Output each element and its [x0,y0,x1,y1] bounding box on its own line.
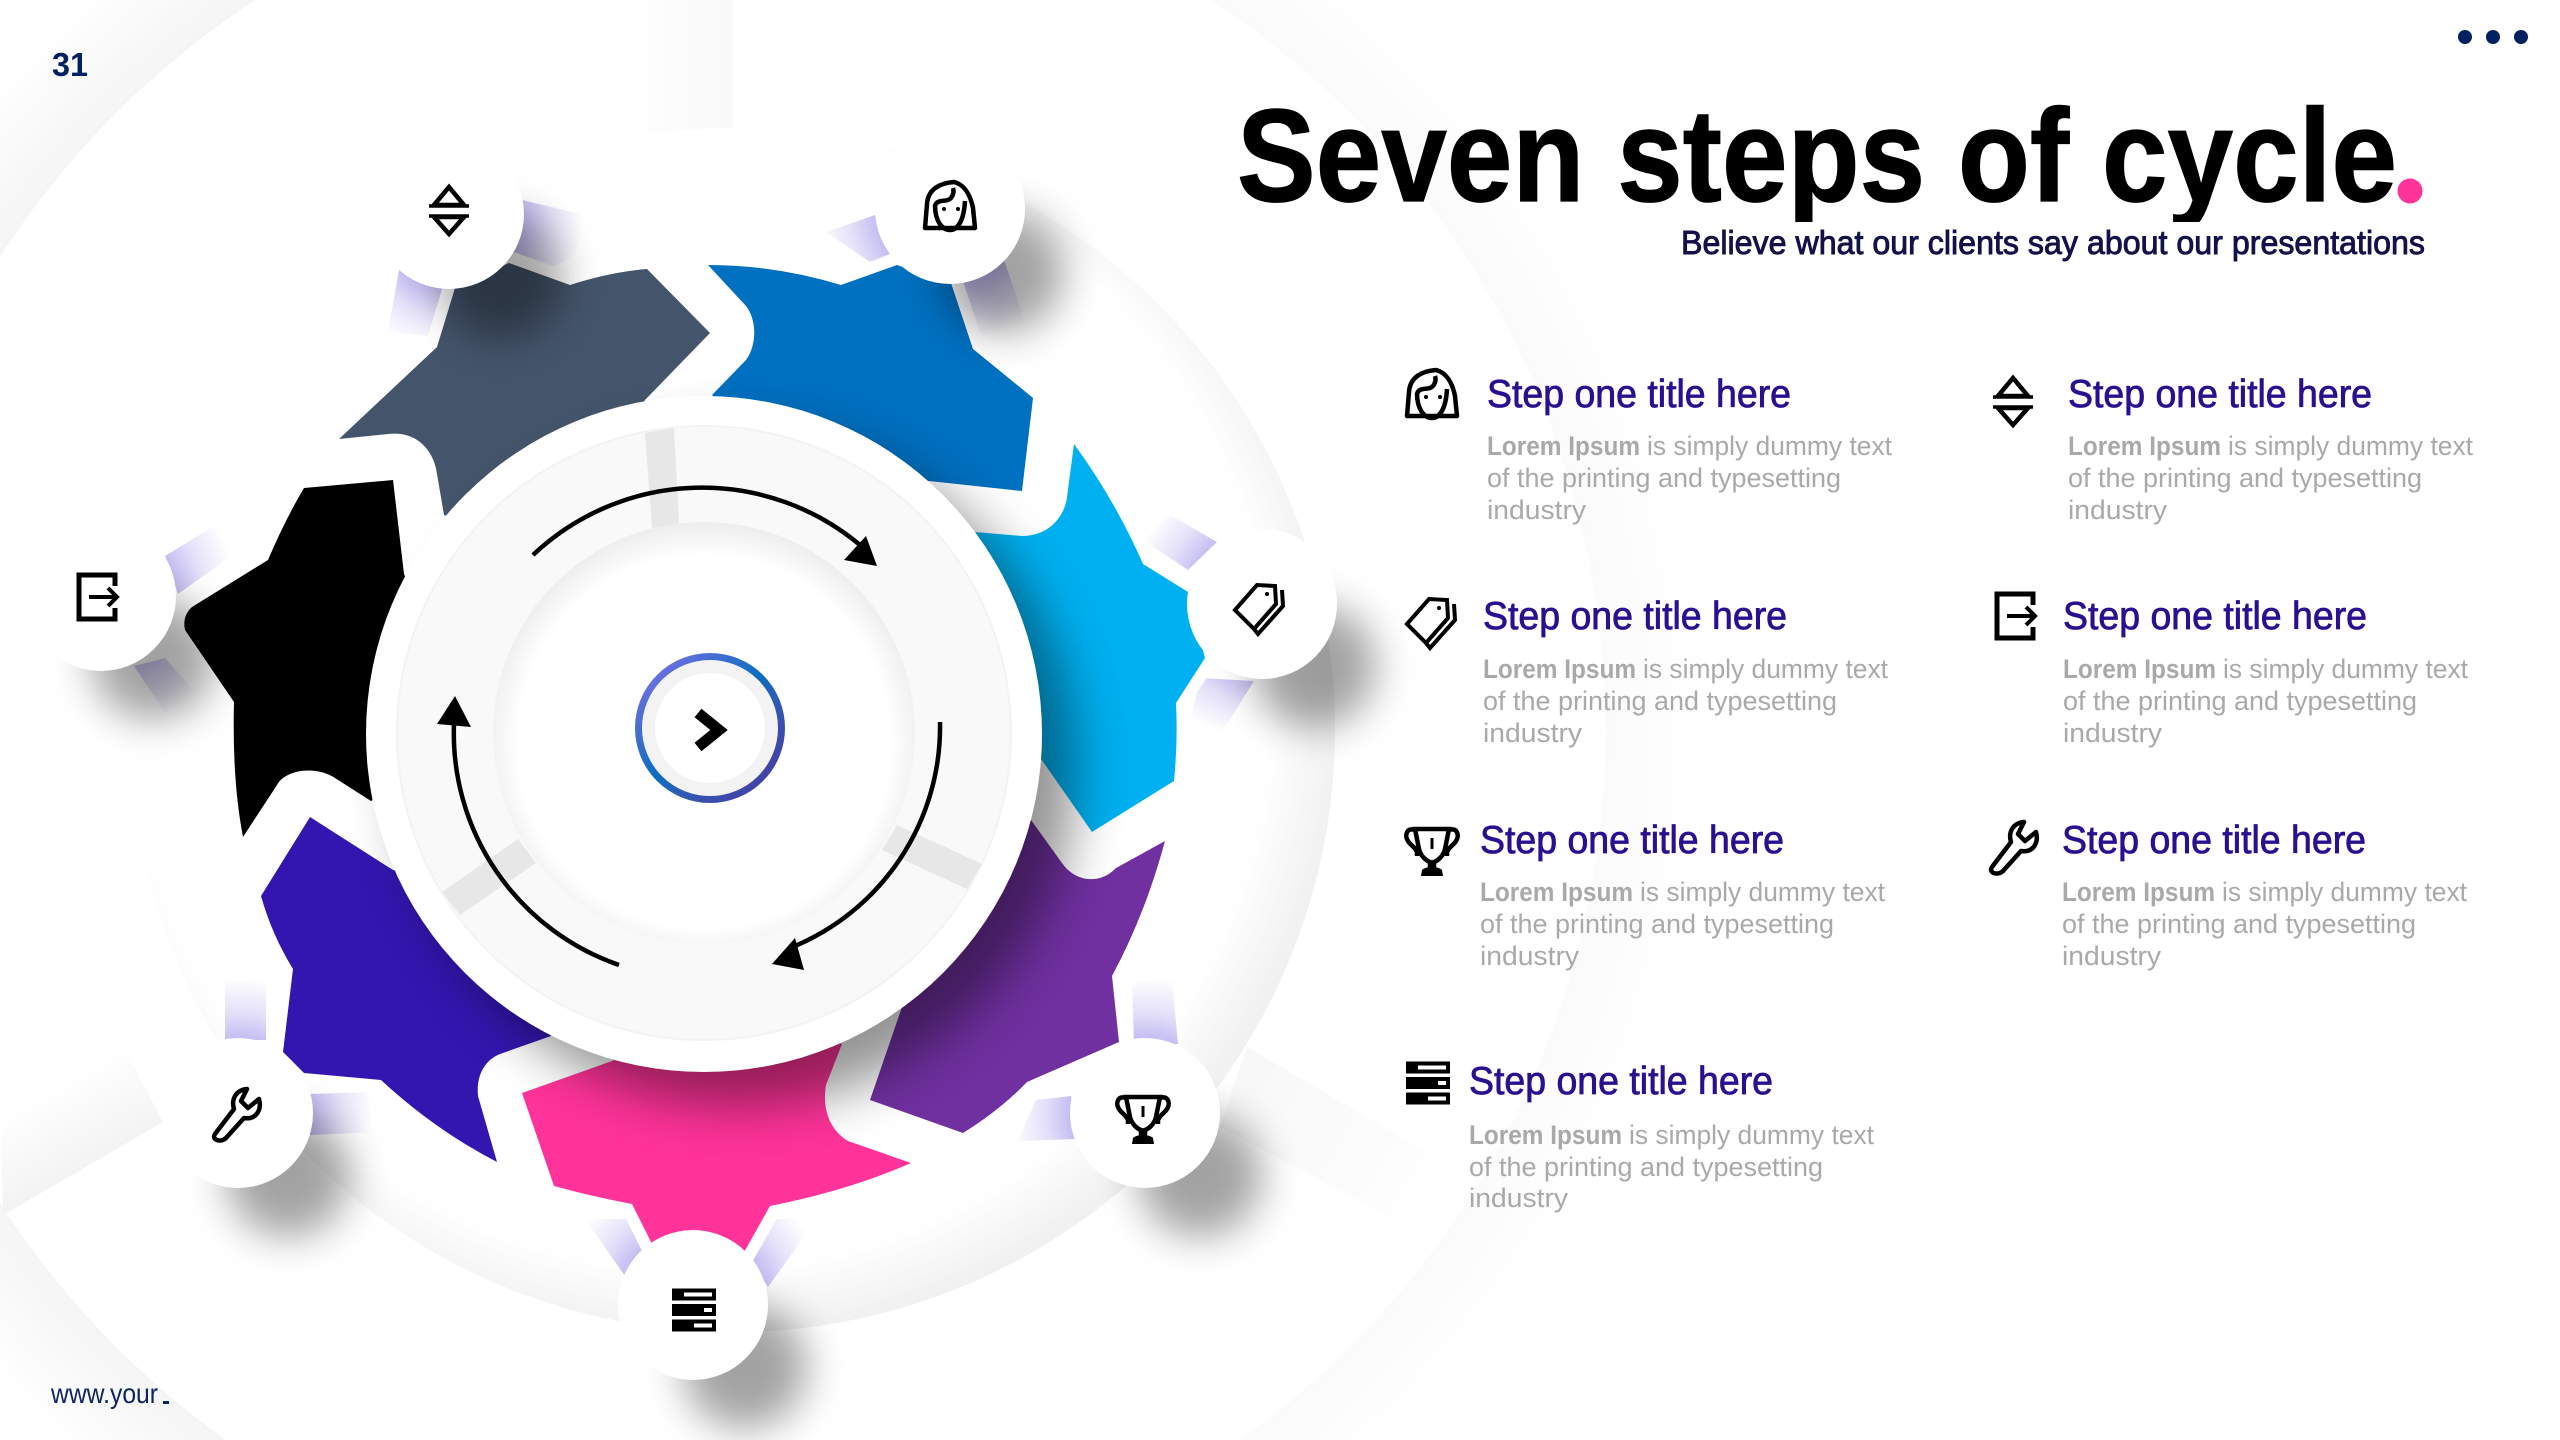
step: server: of the printing and typesetting [1469,1152,1823,1182]
step: trophy [1406,819,1885,971]
node: trophy [1070,1038,1220,1188]
node: tag [1187,529,1337,679]
segment: slate [339,263,710,560]
ring dividers [442,428,982,915]
outer ring [397,426,1011,1040]
segment: cyan [975,444,1205,832]
segment: blue [708,265,1033,520]
step: wrench: Step one title here [2062,819,2366,862]
step: wrench: is simply dummy text [2222,877,2467,907]
central disc shadow [400,430,1076,1106]
step: tag [1407,595,1888,748]
step: tag: Lorem Ipsum [1483,654,1636,684]
step: trophy: Step one title here [1480,819,1784,862]
step: wrench [1991,819,2467,971]
step: exit [1997,594,2468,748]
step: exit: is simply dummy text [2223,654,2468,684]
step: trophy: industry [1480,941,1580,971]
step: updown: Lorem Ipsum [2068,431,2221,461]
step: exit: industry [2063,718,2163,748]
cycle arrows [437,488,940,970]
icon: chevron [698,713,719,747]
step: updown: industry [2068,495,2168,525]
step: tag: industry [1483,718,1583,748]
icon: exit [1997,594,2035,638]
segment: indigo [261,817,551,1162]
arrow: right [772,722,940,970]
website url: www.your [50,1378,158,1409]
node: exit [26,521,176,671]
segment: pink [522,1000,911,1270]
node: server [618,1230,768,1380]
step: server: Step one title here [1469,1060,1773,1103]
icon: tag [1407,599,1455,648]
step: server [1406,1060,1874,1213]
subtitle: Believe what our clients say about our presentations [1681,224,2425,261]
step: face: industry [1487,495,1587,525]
icon: face [1407,370,1457,418]
step: face: Step one title here [1487,373,1791,416]
step: face: is simply dummy text [1647,431,1892,461]
step: exit: of the printing and typesetting [2063,686,2417,716]
step: updown [1993,373,2473,525]
step: face [1407,370,1892,525]
step: wrench: industry [2062,941,2162,971]
arrow: top [533,488,877,566]
step: exit: Lorem Ipsum [2063,654,2216,684]
step: trophy: Lorem Ipsum [1480,877,1633,907]
central disc [366,396,1042,1072]
step: trophy: of the printing and typesetting [1480,909,1834,939]
step: exit: Step one title here [2063,595,2367,638]
icon: trophy [1406,829,1458,876]
page number: 31 [52,46,88,83]
arrow: left [437,696,619,965]
icon: updown [1993,378,2033,425]
step: server: Lorem Ipsum [1469,1120,1622,1150]
menu dots [2458,30,2528,44]
node: updown [374,139,524,289]
inner disc [493,522,915,944]
step: face: of the printing and typesetting [1487,463,1841,493]
lavender shards behind icon nodes [134,200,1254,1287]
step: wrench: Lorem Ipsum [2062,877,2215,907]
cycle segments [184,263,1205,1270]
icon node shadows [91,209,1376,1429]
step: updown: of the printing and typesetting [2068,463,2422,493]
step: updown: is simply dummy text [2228,431,2473,461]
icon: server [1406,1062,1450,1104]
title period [2398,178,2422,204]
icon: wrench [1991,822,2037,874]
center button [638,656,782,800]
step: face: Lorem Ipsum [1487,431,1640,461]
step: wrench: of the printing and typesetting [2062,909,2416,939]
step: server: industry [1469,1183,1569,1213]
segment: purple [870,820,1165,1133]
segment: black [184,480,480,837]
step: tag: of the printing and typesetting [1483,686,1837,716]
step: trophy: is simply dummy text [1640,877,1885,907]
step: tag: is simply dummy text [1643,654,1888,684]
step: updown: Step one title here [2068,373,2372,416]
step: server: is simply dummy text [1629,1120,1874,1150]
background [0,0,1335,1440]
title: Seven steps of cycle [1237,82,2397,229]
step: tag: Step one title here [1483,595,1787,638]
node: wrench [163,1038,313,1188]
node: face [875,134,1025,284]
